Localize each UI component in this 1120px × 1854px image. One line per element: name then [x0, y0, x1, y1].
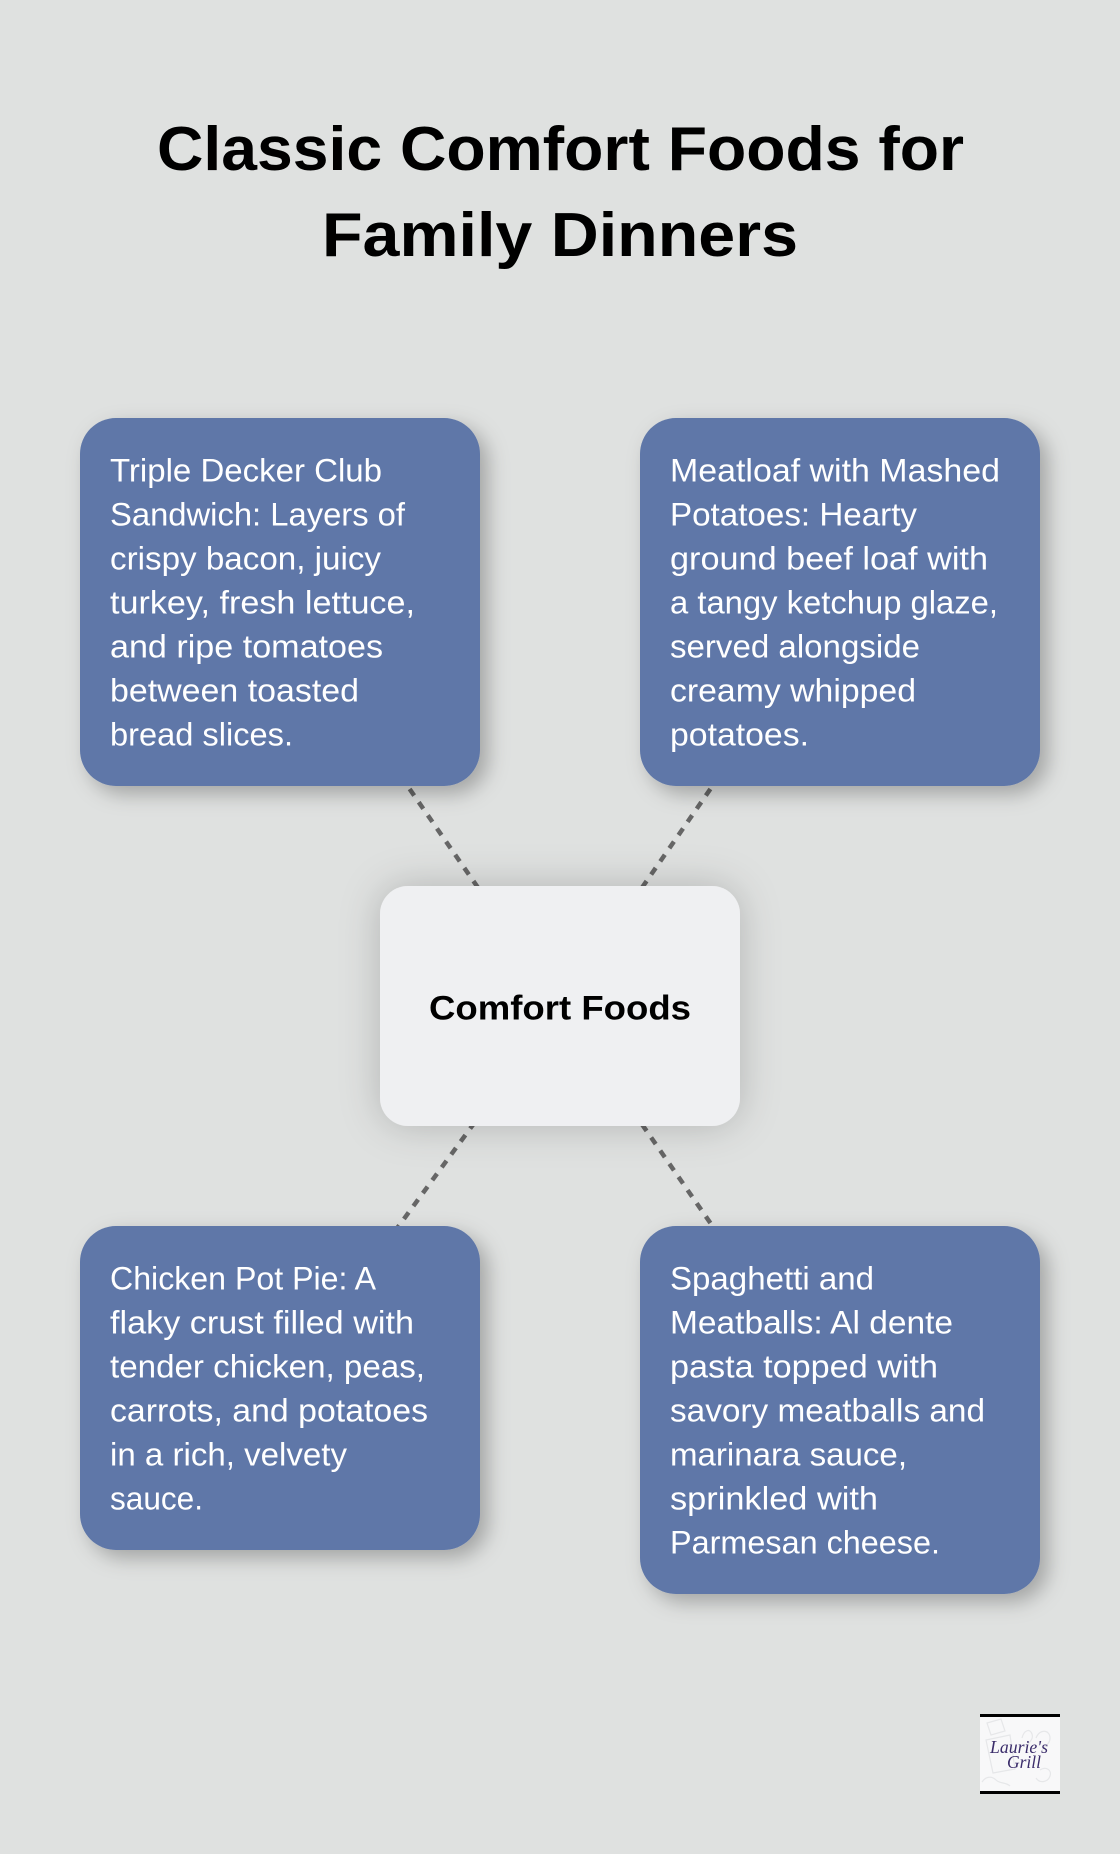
- connector: center to top left: [280, 602, 560, 1006]
- text: spaghetti description: Spaghetti and: [670, 1260, 874, 1296]
- text: triple decker description: and ripe tomatoes: [110, 629, 383, 665]
- text: chicken pot pie description: [110, 1260, 428, 1516]
- connector: center to top right: [560, 602, 840, 1006]
- text: spaghetti description: marinara sauce,: [670, 1436, 907, 1472]
- text: chicken pot pie description: flaky crust filled with: [110, 1304, 414, 1340]
- connector: center to bottom right: [560, 1006, 840, 1410]
- logo: Laurie's Grill: Grill: [1007, 1752, 1041, 1772]
- panel: triple decker club sandwich: [80, 418, 480, 786]
- text: chicken pot pie description: carrots, and potatoes: [110, 1392, 428, 1428]
- title: Classic Comfort Foods for: [157, 115, 964, 184]
- text: meatloaf description: ground beef loaf with: [670, 541, 988, 577]
- text: meatloaf description: Potatoes: Hearty: [670, 497, 917, 533]
- text: chicken pot pie description: sauce.: [110, 1480, 203, 1516]
- text: triple decker description: crispy bacon, juicy: [110, 541, 381, 577]
- panel: center comfort foods: [380, 886, 740, 1126]
- text: spaghetti description: savory meatballs and: [670, 1392, 985, 1428]
- text: meatloaf description: Meatloaf with Mashed: [670, 453, 1000, 489]
- panel: spaghetti and meatballs: [640, 1226, 1040, 1594]
- connector: center to bottom left: [280, 1006, 560, 1388]
- text: chicken pot pie description: tender chicken, peas,: [110, 1348, 425, 1384]
- text: spaghetti description: pasta topped with: [670, 1348, 938, 1384]
- text: meatloaf description: a tangy ketchup glaze,: [670, 585, 998, 621]
- text: comfort foods label: Comfort Foods: [429, 990, 691, 1028]
- title: Family Dinners: [322, 201, 798, 270]
- text: meatloaf description: [670, 453, 1000, 753]
- logo: Laurie's Grill: [980, 1714, 1060, 1794]
- text: triple decker description: Triple Decker Club: [110, 453, 382, 489]
- title: [157, 115, 964, 270]
- panel: meatloaf with mashed potatoes: [640, 418, 1040, 786]
- text: meatloaf description: potatoes.: [670, 717, 809, 753]
- text: spaghetti description: [670, 1260, 985, 1560]
- text: spaghetti description: sprinkled with: [670, 1480, 878, 1516]
- text: spaghetti description: Parmesan cheese.: [670, 1524, 940, 1560]
- text: triple decker description: between toasted: [110, 673, 359, 709]
- text: triple decker description: turkey, fresh lettuce,: [110, 585, 415, 621]
- text: chicken pot pie description: in a rich, velvety: [110, 1436, 347, 1472]
- text: triple decker description: Sandwich: Layers of: [110, 497, 405, 533]
- text: meatloaf description: creamy whipped: [670, 673, 916, 709]
- text: chicken pot pie description: Chicken Pot Pie: A: [110, 1260, 377, 1296]
- text: triple decker description: [110, 453, 415, 753]
- logo: Laurie's Grill: Laurie's: [989, 1737, 1048, 1757]
- text: spaghetti description: Meatballs: Al dente: [670, 1304, 953, 1340]
- panel: chicken pot pie: [80, 1226, 480, 1550]
- text: triple decker description: bread slices.: [110, 717, 293, 753]
- text: meatloaf description: served alongside: [670, 629, 920, 665]
